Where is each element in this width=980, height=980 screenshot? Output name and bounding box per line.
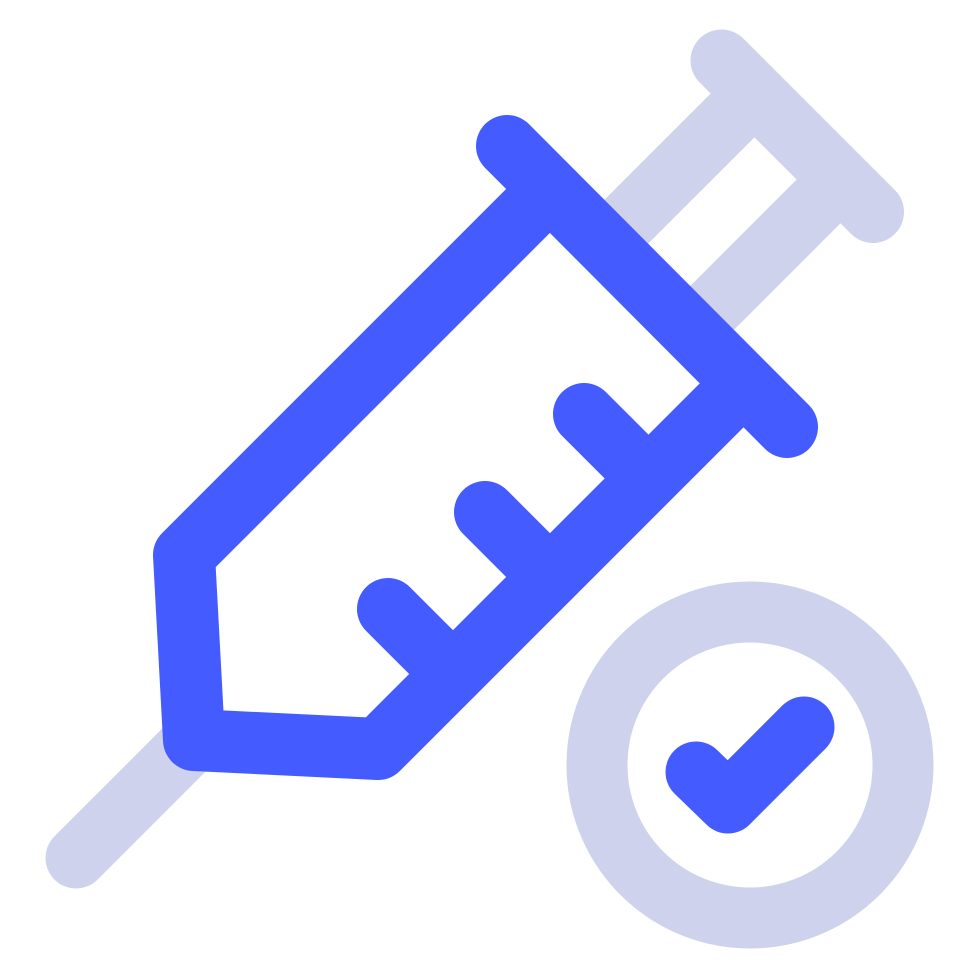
plunger bbox=[620, 60, 873, 308]
check mark bbox=[696, 727, 804, 803]
syringe barrel bbox=[184, 146, 787, 749]
needle bbox=[76, 734, 200, 858]
flange bbox=[507, 146, 787, 427]
barrel outline bbox=[184, 190, 743, 749]
check badge ring bbox=[597, 612, 903, 918]
graduation marks bbox=[388, 414, 647, 674]
